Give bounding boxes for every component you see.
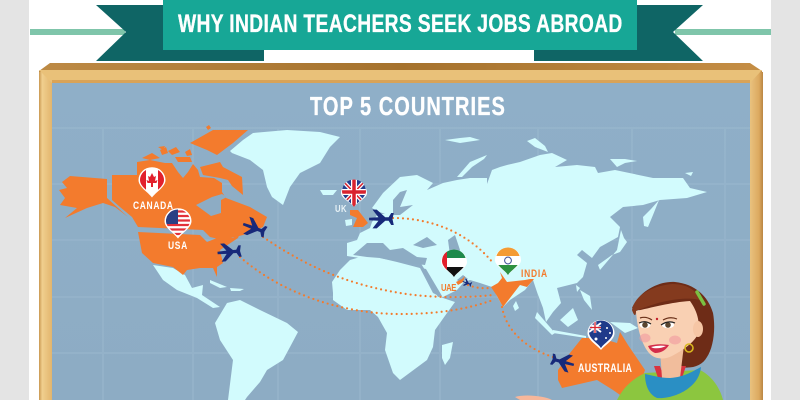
neckline accents [654,366,686,378]
country: UAE [456,276,465,285]
landmass: Caribbean [210,280,244,291]
country: Australia [558,332,645,397]
label: UAE: UAE [441,282,456,293]
plane: UAE route [462,278,473,288]
plane: Canada route [240,216,269,241]
eye: left [639,322,651,328]
brows [640,317,677,320]
landmass: Mexico and Central America [153,265,220,308]
landmass: Iceland [320,190,337,195]
pin: Australia flag [588,320,614,350]
title banner [30,0,771,61]
face [636,301,699,358]
Hudson Bay [196,194,227,216]
neck [660,345,684,378]
label: India: INDIA [521,268,547,280]
plane: UK route [369,210,394,228]
label: UK: UK [335,203,347,214]
plane: Australia route [549,350,576,373]
hairband [697,292,704,304]
bindi [656,318,658,320]
title banner: WHY INDIAN TEACHERS SEEK JOBS ABROAD [178,10,622,38]
country: USA [138,232,240,277]
hair back [632,282,714,368]
earring [685,344,693,352]
wooden board frame [39,63,763,400]
country: Canada [112,125,267,240]
pin: Canada flag [138,167,166,198]
landmass: Africa [332,255,455,380]
scarf [645,367,701,398]
eye: right [661,322,675,328]
label: Canada: CANADA [133,200,173,212]
teacher illustration [515,282,723,400]
landmass: Eurasia [347,153,707,322]
map grid [52,128,750,400]
ear [693,321,703,337]
country: UK [350,210,368,227]
hand [515,396,552,400]
pin: UAE flag [441,249,467,278]
hair fringe [632,284,700,315]
label: Australia: AUSTRALIA [578,363,632,375]
heading: top 5 countries: TOP 5 COUNTRIES [310,91,505,121]
cheeks [640,334,681,344]
flight routes [240,218,553,357]
plane: USA route [217,242,242,262]
country: India [491,272,534,307]
world map [59,125,707,400]
pin: India flag [495,247,521,276]
landmass: South America [215,300,298,400]
shirt [617,370,723,400]
landmass: Novaya Zemlya and Arctic islands [345,137,693,365]
landmass: Greenland [230,130,340,205]
mouth [648,344,669,353]
pin: UK flag [341,179,367,207]
country: Alaska [59,176,128,218]
pin: USA flag [164,208,192,238]
seas [353,190,468,297]
label: USA: USA [168,240,187,252]
